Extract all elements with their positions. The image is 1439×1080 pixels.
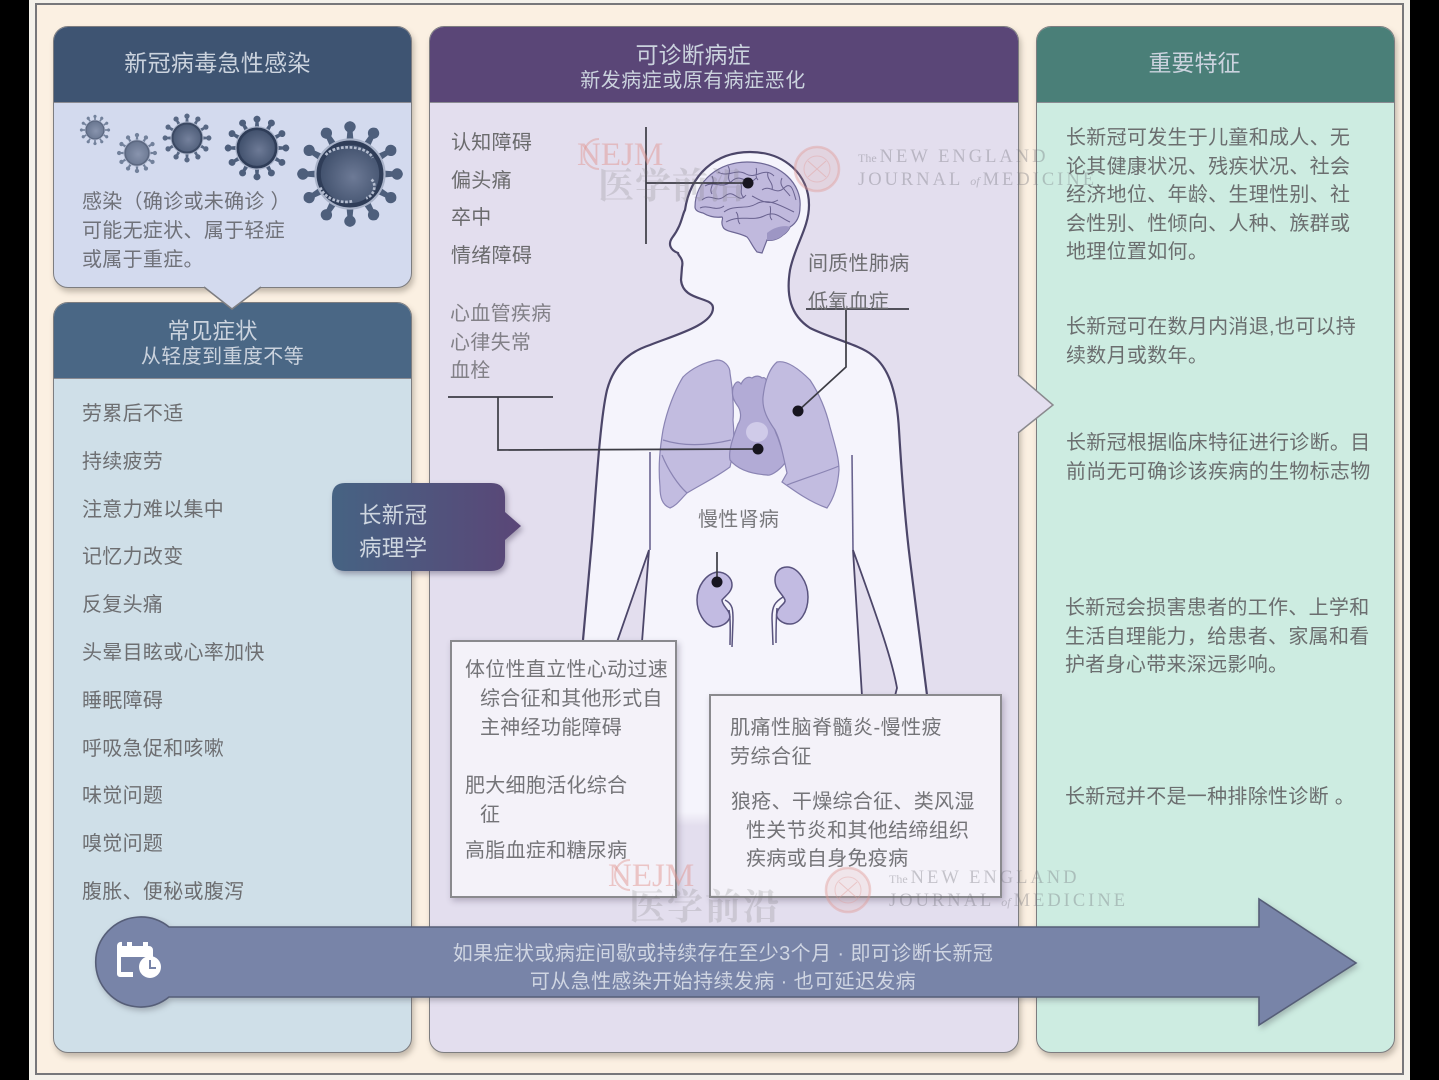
heading: common symptoms [54,303,411,379]
text: feature 1 [1066,121,1350,264]
label group: lung conditions [808,253,910,313]
heading: diagnosable conditions [430,27,1018,103]
journal name: JOURNAL of MEDICINE [858,170,1097,190]
text: infection description [82,191,291,272]
journal name [889,868,1128,911]
label group: neurological conditions [451,132,532,267]
body outline [583,152,927,695]
text: feature 1: 地理位置如何。 [1066,235,1208,264]
callout text: 长新冠 [359,503,427,528]
pointer into key features [1017,375,1053,433]
seal [794,146,840,192]
callout shape [330,482,524,578]
text: symptom list: 味觉问题 [82,785,163,807]
text: feature 4: 护者身心带来深远影响。 [1065,648,1288,677]
leader lines and dots [448,127,909,588]
text: arrow caption: 如果症状或病症间歇或持续存在至少3个月 · 即可诊断长新冠 [453,943,993,965]
heading: diagnosable conditions: 可诊断病症 [636,42,750,68]
text: ME/CFS [730,717,942,768]
text: infection description: 或属于重症。 [82,243,204,272]
watermark Chinese text: 医学前沿 [629,887,781,927]
text: autoimmune disease: 狼疮、干燥综合征、类风湿 [731,785,975,814]
NEJM logo arc [583,138,599,170]
heading: common symptoms: 常见症状 [167,319,258,344]
text: symptom list: 劳累后不适 [82,403,184,425]
lungs [659,360,734,508]
callout text: 病理学 [359,536,427,561]
text: mast cell activation: 征 [480,804,500,826]
text: feature 3 [1066,426,1371,483]
text: feature 4: 生活自理能力，给患者、家属和看 [1065,620,1370,649]
heading: acute infection: 新冠病毒急性感染 [124,50,311,76]
heart [730,376,785,475]
text: POTS: 体位性直立性心动过速 [465,659,668,681]
watermark Chinese text: 医学前沿 [598,166,746,206]
text: symptom list: 头晕目眩或心率加快 [82,642,265,664]
text: feature 1: 长新冠可发生于儿童和成人、无 [1066,121,1350,150]
label group: lung conditions: 间质性肺病 [808,253,910,275]
label group: neurological conditions: 认知障碍 [451,132,532,154]
NEJM logo: NEJM [577,137,663,173]
text: feature 3: 长新冠根据临床特征进行诊断。目 [1066,426,1371,455]
text: symptom list: 反复头痛 [82,594,163,616]
panel: acute infection [53,26,412,288]
text: symptom list: 记忆力改变 [82,546,184,568]
box: autonomic and metabolic conditions [450,640,677,898]
virus 1 [80,115,110,145]
virus 5 [297,121,403,227]
text: feature 1: 会性别、性倾向、人种、族群或 [1066,207,1350,236]
text: symptom list [82,403,265,904]
text: ME/CFS: 劳综合征 [730,746,812,768]
text: arrow caption [453,943,993,993]
gap between left arm and torso [617,550,649,642]
right lung [763,362,839,508]
text: autoimmune disease: 疾病或自身免疫病 [746,848,908,870]
NEJM logo arc [614,859,630,891]
label group: neurological conditions: 偏头痛 [451,170,512,192]
text: symptom list: 嗅觉问题 [82,833,163,855]
text: dyslipidemia and diabetes: 高脂血症和糖尿病 [465,840,627,862]
text: ME/CFS: 肌痛性脑脊髓炎-慢性疲 [730,717,942,739]
text: feature 1: 论其健康状况、残疾状况、社会 [1066,150,1350,179]
label group: cardiovascular conditions [450,303,552,382]
text: symptom list: 持续疲劳 [82,451,163,473]
label: chronic kidney disease: 慢性肾病 [698,509,779,531]
virus 4 [225,116,289,180]
text: mast cell activation [465,775,627,826]
label group: cardiovascular conditions: 心律失常 [450,332,531,354]
text: mast cell activation: 肥大细胞活化综合 [465,775,627,797]
text: symptom list: 腹胀、便秘或腹泻 [82,875,244,904]
text: feature 2 [1066,316,1356,368]
brain [695,162,800,253]
text: autoimmune disease [731,785,975,870]
torso side lines [650,452,853,550]
heading: acute infection [54,27,411,103]
label group: lung conditions: 低氧血症 [808,291,889,313]
text: feature 3: 前尚无可确诊该疾病的生物标志物 [1066,461,1370,483]
text: autoimmune disease: 性关节炎和其他结缔组织 [746,820,969,842]
text: POTS [465,659,668,739]
heading: diagnosable conditions: 新发病症或原有病症恶化 [580,70,806,92]
journal name: JOURNAL of MEDICINE [889,891,1128,911]
virus 2 [117,133,157,173]
journal name: The NEW ENGLAND [889,868,1079,888]
journal name: The NEW ENGLAND [858,147,1048,167]
box: ME/CFS and autoimmune [709,694,1002,898]
watermark: top NEJM [577,137,1097,206]
text: POTS: 主神经功能障碍 [480,717,622,739]
text: infection description: 感染（确诊或未确诊 ） [82,191,291,213]
text: feature 4 [1065,591,1370,677]
kidneys [697,567,808,647]
heading: key features: 重要特征 [1148,50,1240,76]
heading: common symptoms: 从轻度到重度不等 [141,346,304,368]
NEJM logo: NEJM [608,858,694,894]
text: feature 2: 长新冠可在数月内消退,也可以持 [1066,316,1356,338]
body silhouette [583,152,927,830]
gap between right arm and torso [853,550,897,696]
text: feature 4: 长新冠会损害患者的工作、上学和 [1065,591,1370,620]
text: POTS: 综合征和其他形式自 [480,688,663,710]
callout: long COVID pathology [330,482,524,578]
heading: key features [1037,27,1394,103]
virus 3 [162,114,212,162]
label group: cardiovascular conditions: 血栓 [450,360,491,382]
label group: cardiovascular conditions: 心血管疾病 [450,303,552,325]
panel: common symptoms [53,302,412,1053]
text: feature 1: 经济地位、年龄、生理性别、社 [1066,178,1350,207]
text: infection description: 可能无症状、属于轻症 [82,214,285,243]
text: feature 2: 续数月或数年。 [1066,339,1208,368]
watermark: bottom NEJM [608,858,1128,927]
text: symptom list: 注意力难以集中 [82,499,224,521]
label group: neurological conditions: 卒中 [451,207,492,229]
text: symptom list: 呼吸急促和咳嗽 [82,738,224,760]
panel: diagnosable conditions [429,26,1019,1053]
journal name [858,147,1097,190]
label group: neurological conditions: 情绪障碍 [451,245,532,267]
callout text [359,503,427,561]
text: feature 5: 长新冠并不是一种排除性诊断 。 [1065,780,1355,809]
text: symptom list: 睡眠障碍 [82,690,163,712]
seal [824,866,872,914]
text: arrow caption: 可从急性感染开始持续发病 · 也可延迟发病 [530,971,916,993]
panel: key features [1036,26,1395,1053]
